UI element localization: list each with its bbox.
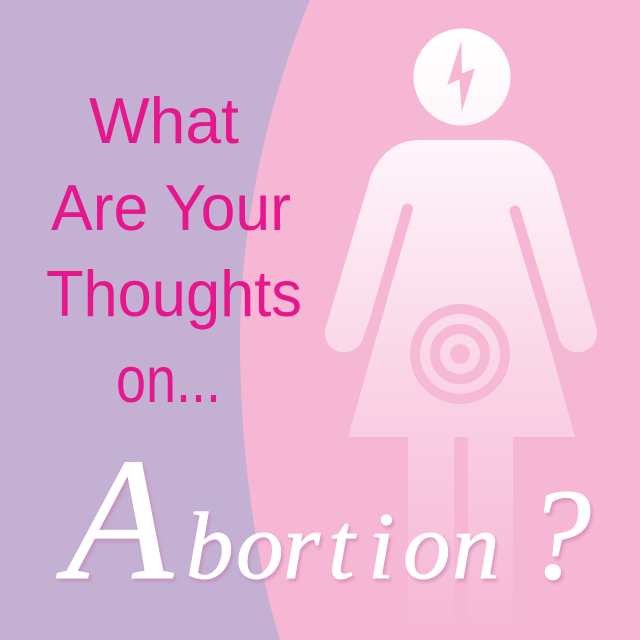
title line 3: Thoughts	[46, 257, 302, 330]
title: What Are Your Thoughts on...	[46, 84, 302, 416]
figure: body with arms and skirt	[325, 140, 597, 437]
title line 4: on...	[116, 343, 221, 416]
female figure pictogram	[325, 28, 597, 625]
target middle ring	[435, 329, 485, 379]
figure: left arm gap	[370, 209, 408, 338]
target outer ring	[415, 309, 505, 399]
target on abdomen	[415, 309, 505, 399]
icon: head	[414, 28, 510, 126]
figure: left leg	[408, 437, 454, 625]
figure: right leg	[468, 437, 513, 625]
icon: lightning bolt	[447, 41, 475, 112]
script heading: Abortion?: bortion	[186, 493, 500, 599]
script heading: Abortion?: ?	[526, 463, 591, 607]
background: pink curved panel	[240, 0, 640, 640]
target bullseye	[450, 344, 470, 364]
title line 1: What	[89, 84, 239, 157]
script heading: Abortion?: A	[56, 422, 174, 616]
figure: right arm gap	[515, 211, 555, 344]
title line 2: Are Your	[51, 171, 291, 244]
